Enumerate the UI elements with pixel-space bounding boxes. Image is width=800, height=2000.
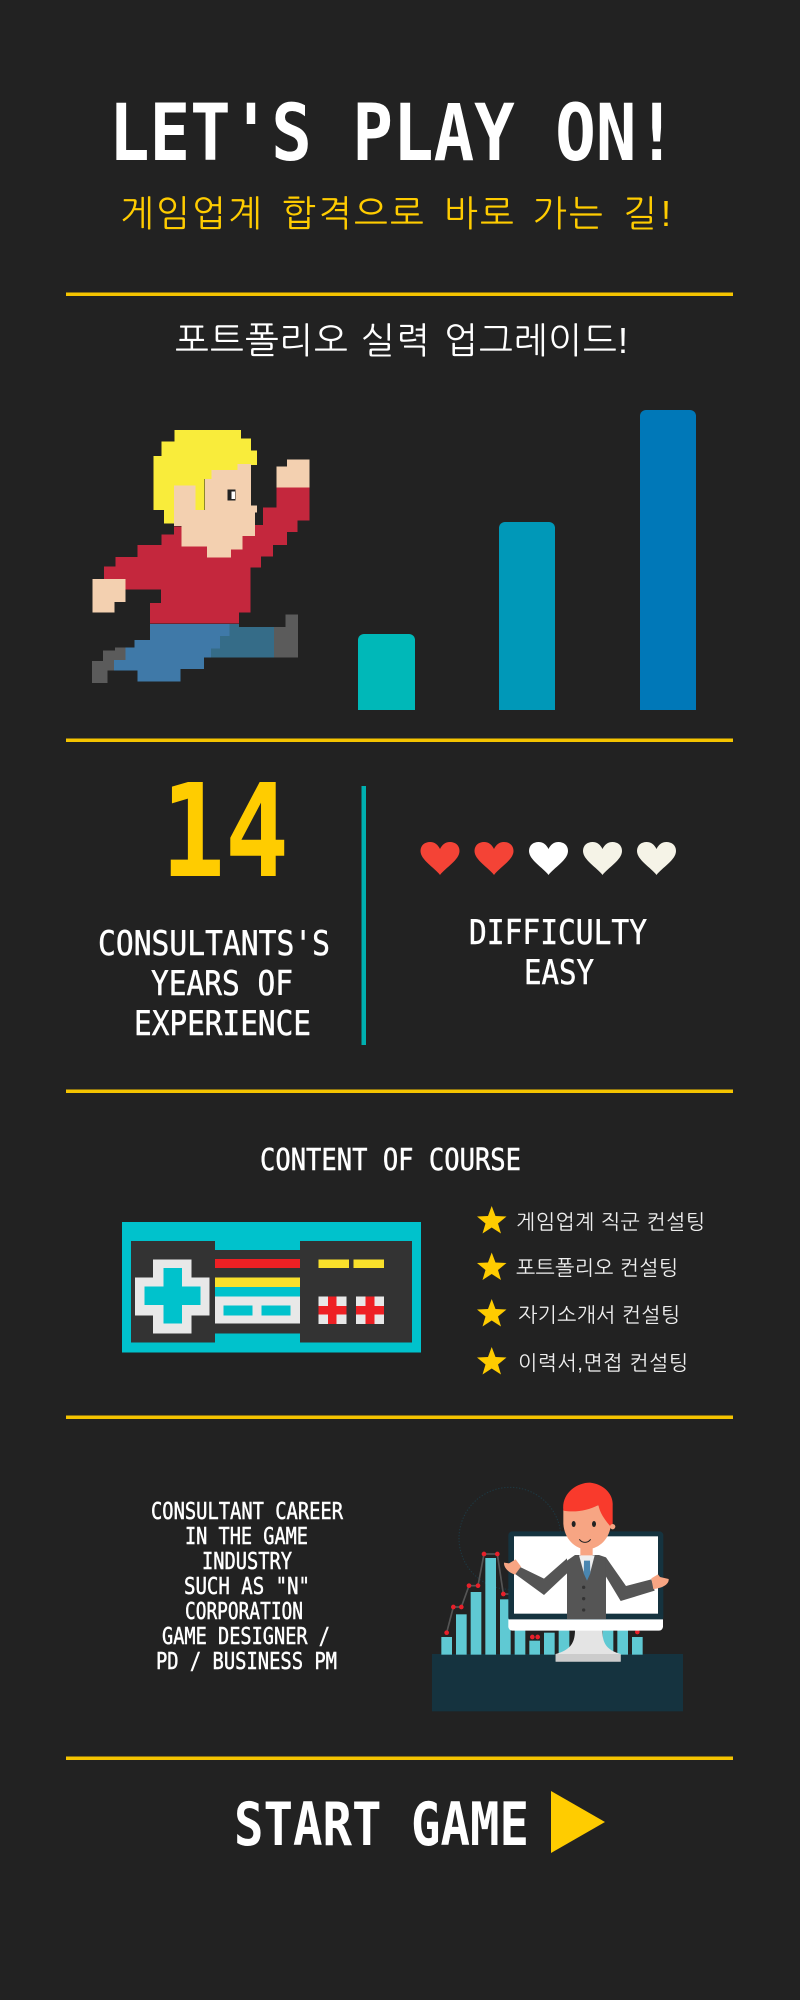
- text block: consultant career: CONSULTANT CAREER: [151, 1499, 343, 1525]
- call to action: start game: START GAME: [234, 1790, 529, 1860]
- text block: consultant career: PD / BUSINESS PM: [156, 1649, 337, 1675]
- stat: 14 years: [98, 757, 330, 1044]
- stat label: YEARS OF: [151, 964, 293, 1004]
- stat label: EXPERIENCE: [134, 1004, 311, 1044]
- icon: play arrow: [551, 1791, 605, 1853]
- text block: consultant career: INDUSTRY: [202, 1549, 292, 1575]
- icon: star 3: [477, 1299, 506, 1326]
- item 1: 게임업계 직군 컨설팅: [516, 1211, 705, 1234]
- item 2: 포트폴리오 컨설팅: [516, 1257, 678, 1280]
- difficulty label: [469, 913, 647, 993]
- text block: consultant career: IN THE GAME: [185, 1524, 308, 1550]
- stat label: [98, 924, 330, 1044]
- text block: consultant career: SUCH AS "N": [184, 1574, 310, 1600]
- checklist: [477, 1206, 705, 1375]
- icon: pixel character jumping: [92, 430, 309, 683]
- head: [563, 1503, 611, 1549]
- number 14: 14: [161, 757, 289, 907]
- title: LET'S PLAY ON!: [109, 89, 677, 179]
- text block: consultant career: CORPORATION: [185, 1599, 303, 1625]
- item 4: 이력서,면접 컨설팅: [518, 1352, 688, 1375]
- icon: difficulty hearts: [420, 842, 676, 875]
- subtitle: 게임업계 합격으로 바로 가는 길!: [120, 193, 671, 234]
- bar 2: [499, 522, 555, 710]
- heading: portfolio upgrade: 포트폴리오 실력 업그레이드!: [175, 320, 628, 361]
- difficulty label: DIFFICULTY: [469, 913, 647, 953]
- text block: consultant career: [151, 1499, 343, 1675]
- suit: [567, 1555, 606, 1619]
- icon: game controller: [122, 1222, 421, 1353]
- heading: content of course: CONTENT OF COURSE: [260, 1143, 521, 1178]
- item 3: 자기소개서 컨설팅: [518, 1304, 680, 1327]
- stat label: CONSULTANTS'S: [98, 924, 330, 964]
- bar 3: [640, 410, 696, 710]
- bar 1: [358, 634, 415, 710]
- difficulty label: EASY: [524, 953, 594, 993]
- illustration: consultant in monitor: [432, 1483, 683, 1711]
- bar chart: [358, 410, 696, 710]
- icon: star 4: [477, 1347, 506, 1374]
- icon: star 1: [477, 1206, 506, 1234]
- text block: consultant career: GAME DESIGNER /: [162, 1624, 330, 1650]
- icon: star 2: [477, 1252, 506, 1280]
